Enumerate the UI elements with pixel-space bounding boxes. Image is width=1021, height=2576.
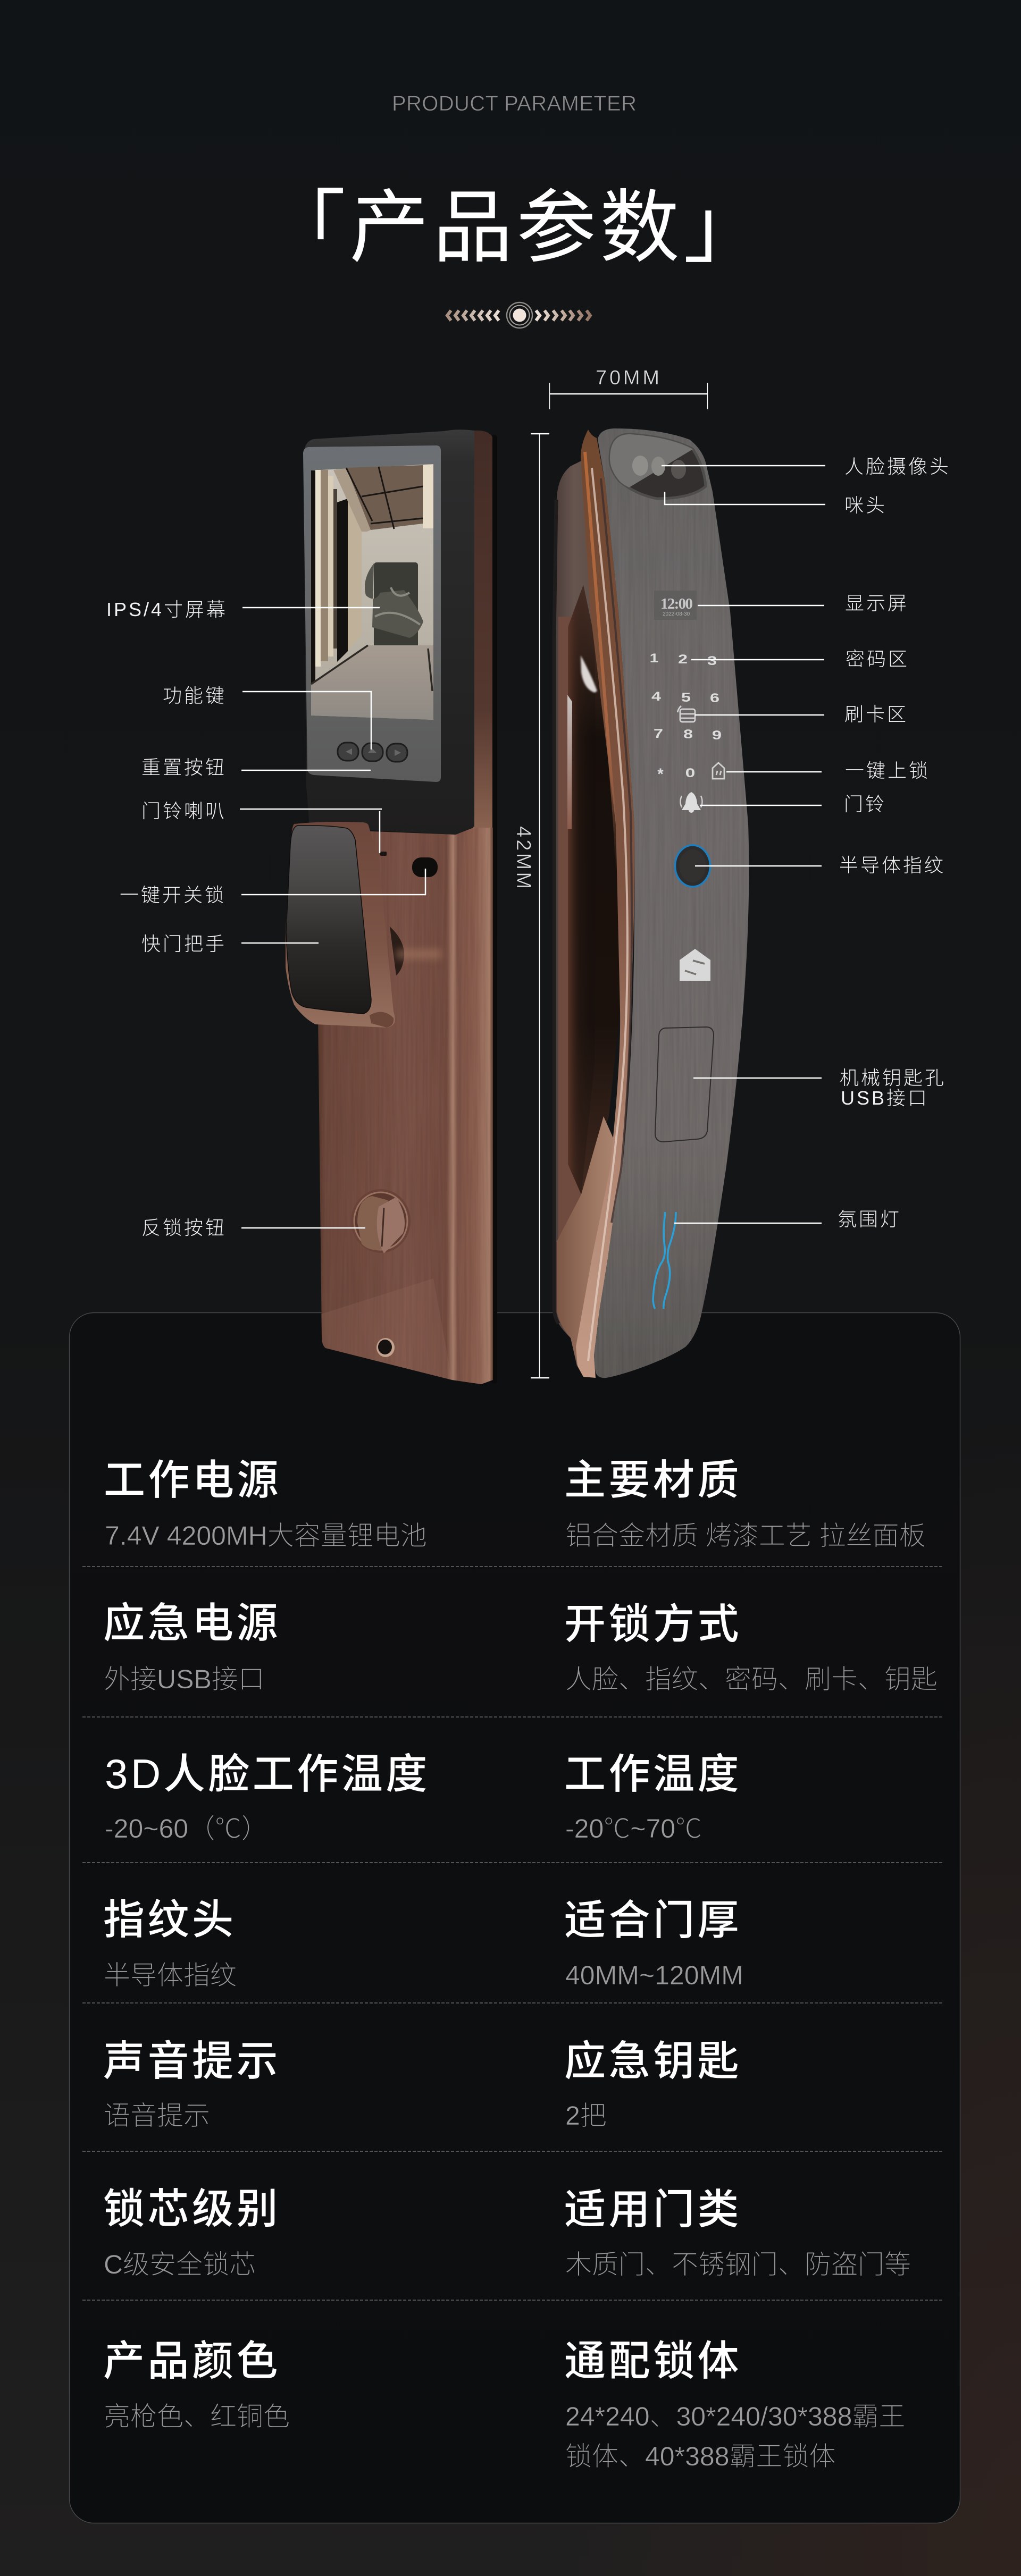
row: cylinder / door type: 锁芯级别 (103, 2185, 281, 2232)
dimension: 42MM height: 42MM (512, 826, 534, 889)
label: doorbell: 门铃 (844, 793, 886, 815)
plate bevel (321, 1278, 452, 1380)
row: power / material: 主要材质 (564, 1457, 742, 1503)
product: lock front view (286, 430, 497, 1384)
row: color / lock body: 通配锁体 (564, 2337, 742, 2384)
row: cylinder / door type: 木质门、不锈钢门、防盗门等 (565, 2250, 911, 2279)
keypad digits: 3 (707, 654, 717, 668)
grey front face (594, 428, 749, 1378)
row: color / lock body: 锁体、40*388霸王锁体 (565, 2442, 836, 2471)
row: temperature: -20℃~70℃ (565, 1814, 702, 1843)
icon: doorbell (681, 792, 702, 813)
row: temperature: -20~60（℃） (105, 1814, 268, 1843)
label: microphone (665, 492, 887, 516)
row: fingerprint / door thickness: 适合门厚 (564, 1897, 742, 1943)
copper rim (576, 430, 634, 1378)
speaker slot and one-touch button (380, 852, 438, 877)
row: temperature (105, 1750, 742, 1843)
label: key hole and USB (693, 1067, 946, 1109)
row: fingerprint / door thickness: 指纹头 (103, 1896, 237, 1943)
row: cylinder / door type (103, 2185, 911, 2279)
row: cylinder / door type: 适用门类 (564, 2186, 742, 2233)
label: password area: 密码区 (846, 648, 909, 670)
label: reset button: 重置按钮 (141, 756, 227, 778)
screw hole (376, 1338, 395, 1357)
row: voice / key: 声音提示 (103, 2038, 281, 2084)
label: key hole and USB: 机械钥匙孔 (840, 1067, 946, 1089)
label: one-touch lock: 一键开关锁 (120, 884, 226, 906)
copper side panel (558, 617, 582, 1239)
label: doorbell speaker: 门铃喇叭 (141, 800, 227, 822)
row: color / lock body: 产品颜色 (103, 2337, 281, 2384)
label: IPS screen: IPS/4寸屏幕 (106, 599, 228, 620)
row: emergency power / unlock methods: 应急电源 (103, 1600, 281, 1646)
row: power / material: 铝合金材质 烤漆工艺 拉丝面板 (565, 1521, 926, 1551)
row: power / material (104, 1457, 926, 1551)
function buttons (338, 743, 407, 762)
specification table (82, 1457, 944, 2471)
label: one-touch lock (120, 869, 425, 906)
label: function keys (163, 685, 371, 750)
icon: lock (713, 763, 724, 779)
row: power / material: 工作电源 (104, 1457, 281, 1503)
keypad digits: 4 (651, 689, 661, 704)
label: card area: 刷卡区 (844, 703, 908, 725)
row: voice / key: 2把 (565, 2101, 607, 2131)
screen image: interior scene (311, 464, 433, 720)
ambient light strips (653, 1212, 676, 1309)
row: cylinder / door type: C级安全锁芯 (104, 2250, 256, 2279)
row: emergency power / unlock methods (103, 1600, 938, 1694)
panel: parameter card (69, 1313, 960, 2523)
label: face camera: 人脸摄像头 (844, 456, 951, 477)
row: temperature: 3D人脸工作温度 (105, 1750, 430, 1797)
keypad digits (650, 651, 722, 783)
thumb turn (351, 1189, 411, 1253)
dimension: 42MM height (512, 434, 549, 1378)
label: key hole and USB: USB接口 (841, 1087, 929, 1109)
handle recess (567, 585, 620, 1194)
row: power / material: 7.4V 4200MH大容量锂电池 (105, 1521, 427, 1551)
label: one-touch lock: 一键上锁 (845, 760, 930, 781)
black display housing (304, 430, 474, 835)
label: microphone: 咪头 (844, 494, 887, 516)
label: ambient light: 氛围灯 (838, 1208, 901, 1230)
copper strip upper (473, 431, 492, 829)
product: lock side view (553, 428, 749, 1378)
time display (654, 591, 697, 620)
label: function keys: 功能键 (163, 685, 227, 706)
row: fingerprint / door thickness (103, 1896, 743, 1990)
dimension: 70MM width (550, 367, 707, 409)
keypad digits: 5 (681, 691, 691, 705)
label: anti-lock button: 反锁按钮 (141, 1217, 227, 1239)
row: color / lock body (103, 2337, 905, 2471)
handle base copper (557, 1116, 625, 1377)
keypad digits: 6 (710, 691, 719, 705)
handle stem (390, 927, 441, 975)
keypad digits: 1 (650, 651, 658, 665)
row: temperature: 工作温度 (564, 1750, 742, 1797)
copper plate (316, 828, 493, 1384)
brand logo (680, 949, 710, 981)
icon: card reader (677, 706, 695, 722)
row: color / lock body: 24*240、30*240/30*388霸王 (565, 2402, 905, 2431)
time display: 12:00 (660, 595, 693, 612)
keypad digits: 7 (654, 727, 663, 741)
dividers (82, 1567, 944, 2300)
keypad digits: 0 (685, 766, 695, 780)
keypad digits: 9 (712, 728, 722, 743)
black side edge (491, 435, 497, 1384)
callouts: right labels (662, 456, 951, 1230)
label: quick handle: 快门把手 (141, 933, 227, 955)
row: voice / key: 应急钥匙 (564, 2038, 742, 2084)
row: emergency power / unlock methods: 开锁方式 (564, 1601, 742, 1647)
door handle (286, 822, 441, 1028)
grey screen bezel (303, 445, 441, 782)
keypad digits: * (657, 765, 664, 783)
row: fingerprint / door thickness: 40MM~120MM (565, 1960, 743, 1990)
dimension: 70MM width: 70MM (596, 367, 659, 389)
title: 「产品参数」 (266, 183, 767, 272)
row: voice / key: 语音提示 (104, 2101, 210, 2131)
keypad digits: 2 (678, 652, 688, 667)
label: display: 显示屏 (845, 592, 909, 614)
rear dark edge (554, 500, 558, 1324)
subtitle: PRODUCT PARAMETER: PRODUCT PARAMETER (392, 92, 637, 115)
label: fingerprint: 半导体指纹 (839, 854, 945, 876)
label: doorbell speaker (141, 800, 382, 853)
row: emergency power / unlock methods: 外接USB接口 (104, 1664, 265, 1694)
fingerprint sensor (675, 845, 710, 887)
ornament: chevrons and ring (447, 302, 590, 328)
rear body (553, 460, 622, 1366)
row: voice / key (103, 2038, 742, 2131)
time display: 2022-08-30 (663, 611, 690, 617)
row: color / lock body: 亮枪色、红铜色 (104, 2402, 290, 2431)
keypad digits: 8 (683, 727, 693, 742)
row: fingerprint / door thickness: 半导体指纹 (104, 1960, 237, 1990)
camera window (610, 434, 706, 499)
callouts: left labels (106, 599, 425, 1239)
row: emergency power / unlock methods: 人脸、指纹、密码、刷卡、钥匙 (565, 1664, 938, 1694)
key cover (655, 1027, 714, 1142)
